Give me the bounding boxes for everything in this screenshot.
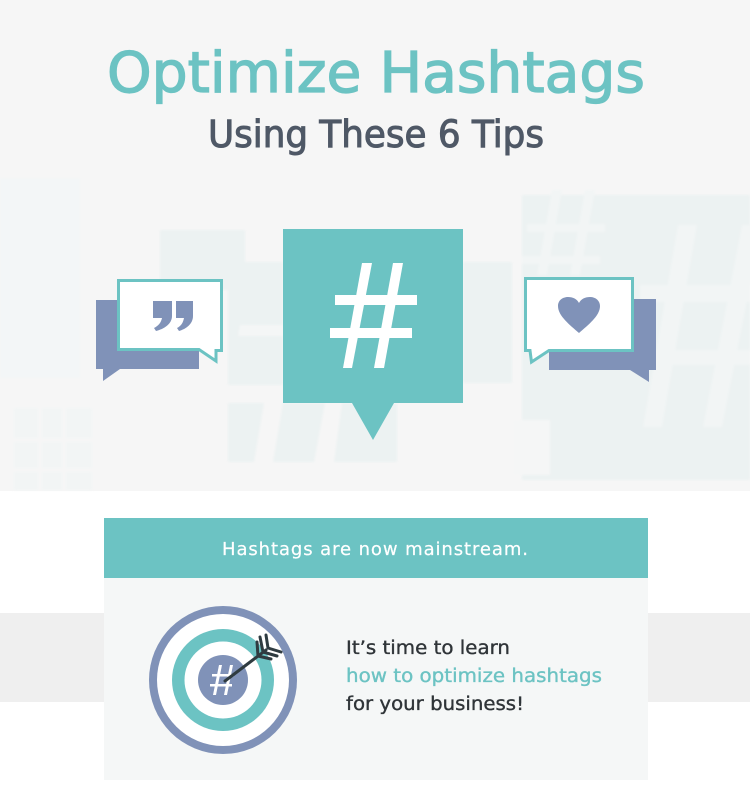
body text: for your business! [346, 694, 524, 715]
icon: target with arrow [149, 606, 297, 754]
icon: quote mark [153, 301, 193, 331]
card header: Hashtags are now mainstream. [222, 539, 528, 560]
left speech bubbles with quote mark [96, 280, 222, 381]
hero background panel [0, 0, 750, 491]
card header [104, 518, 648, 578]
title: Optimize Hashtags [107, 41, 645, 106]
central hashtag speech bubble [283, 229, 463, 440]
icon: hashtag [330, 263, 417, 368]
card body [104, 578, 648, 780]
body text: It’s time to learn [346, 638, 510, 659]
icon: heart [558, 297, 600, 333]
small hashtag [210, 665, 234, 695]
right speech bubbles with heart [526, 278, 656, 382]
body text: how to optimize hashtags [346, 666, 602, 687]
subtitle: Using These 6 Tips [208, 113, 544, 156]
arrow [225, 635, 281, 681]
grey background band [0, 613, 750, 702]
card [104, 518, 648, 780]
body text [346, 638, 602, 715]
